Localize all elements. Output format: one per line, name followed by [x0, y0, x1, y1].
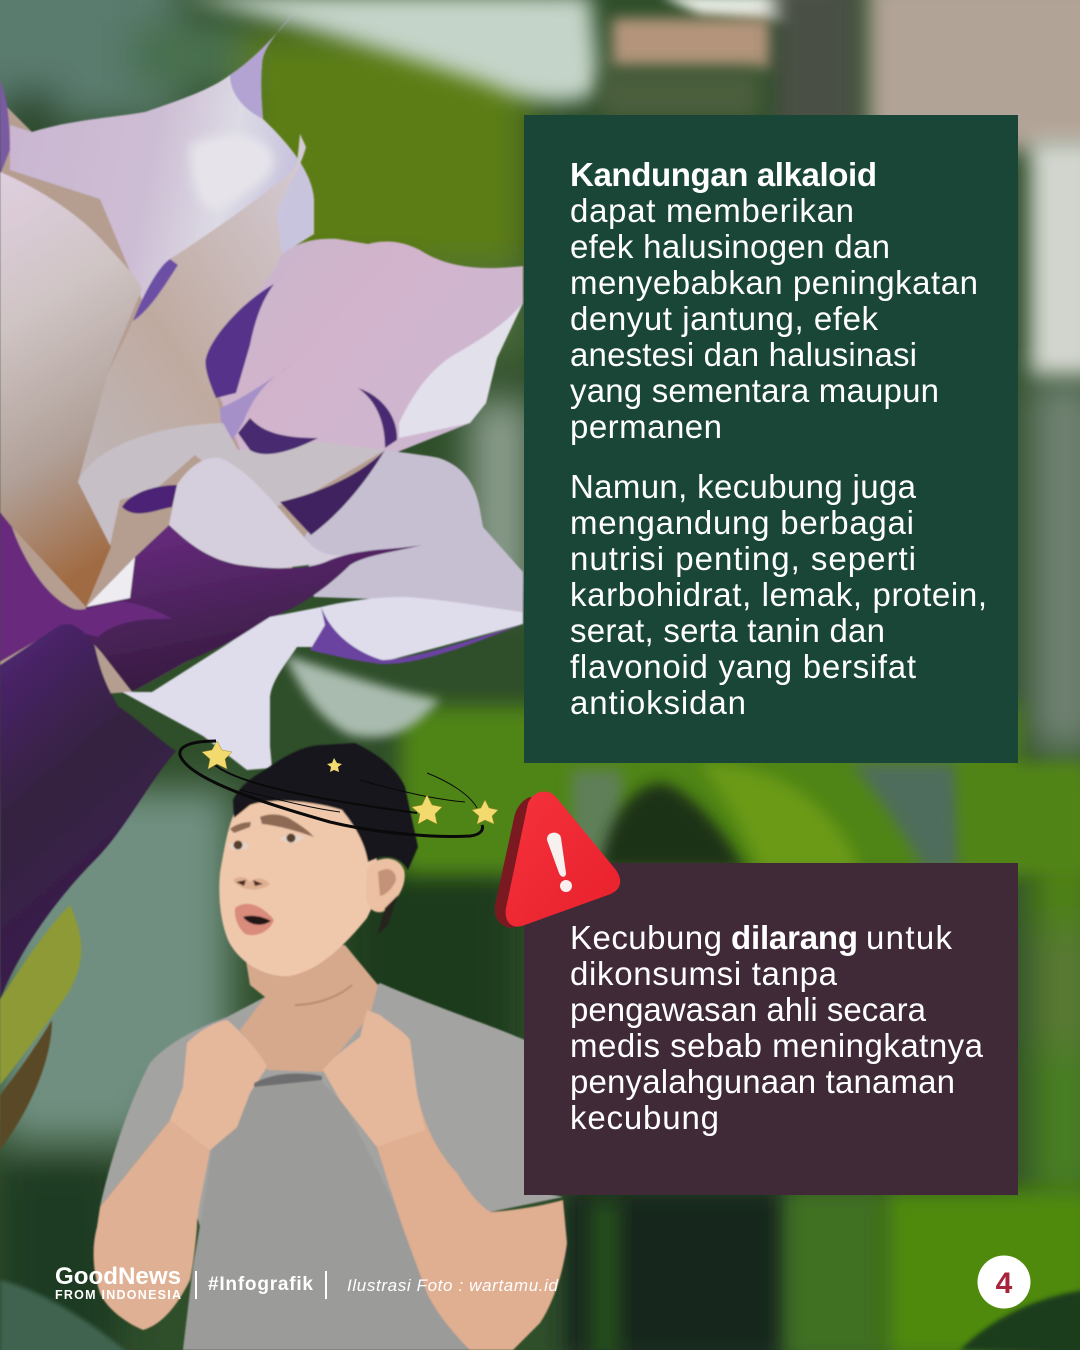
under fold: [78, 423, 385, 545]
text: alkaloid effects: yang sementara maupun: [570, 372, 939, 409]
petal tip lavender: [230, 0, 304, 119]
text: warning message: Kecubung: [570, 919, 722, 956]
text: alkaloid effects: anestesi dan halusinasi: [570, 336, 917, 373]
text: alkaloid effects: dapat memberikan: [570, 192, 854, 229]
middle pale petal: [78, 134, 306, 482]
text: nutrition: karbohidrat, lemak, protein,: [570, 576, 987, 613]
dark purple petal: [80, 525, 422, 692]
page number: 4: [996, 1267, 1013, 1300]
text: nutrition: [570, 468, 987, 721]
green band between panels: [400, 706, 1020, 876]
panel: warning: [524, 863, 1018, 1195]
torso: [183, 1080, 470, 1350]
text: warning message: [570, 919, 984, 1136]
left arm: [94, 1120, 237, 1330]
text: warning message: untuk: [866, 919, 952, 956]
text: alkaloid effects: menyebabkan peningkatan: [570, 264, 978, 301]
footer logo: GoodNews: [55, 1263, 181, 1290]
pale top leaf: [180, 0, 600, 102]
text: alkaloid effects: denyut jantung, efek: [570, 300, 878, 337]
text: warning message: dilarang: [731, 919, 858, 956]
text: warning message: pengawasan ahli secara: [570, 991, 927, 1028]
head: [219, 795, 385, 976]
curl dark: [238, 418, 318, 454]
text: alkaloid effects: [570, 156, 978, 445]
left fist: [170, 1020, 267, 1150]
text: nutrition: serat, serta tanin dan: [570, 612, 885, 649]
spike: [220, 363, 294, 455]
hair: [233, 743, 418, 870]
footer logo: FROM INDONESIA: [55, 1288, 181, 1302]
person with stunned expression: [94, 743, 567, 1350]
photo credit: Ilustrasi Foto : wartamu.id: [347, 1276, 559, 1295]
text: alkaloid effects: Kandungan alkaloid: [570, 156, 877, 193]
text: alkaloid effects: permanen: [570, 408, 722, 445]
text: nutrition: antioksidan: [570, 684, 746, 721]
lower lobe: [169, 458, 350, 575]
dizzy ring and stars: [180, 741, 498, 836]
lower right petal: [304, 450, 523, 612]
ear: [366, 858, 405, 912]
eyes: [228, 834, 304, 850]
mouth: [235, 904, 274, 935]
shirt: [100, 983, 563, 1350]
eyebrows: [230, 814, 314, 837]
flower: [0, 0, 523, 1150]
dark inner tip: [205, 284, 274, 398]
left purple stripe: [0, 80, 10, 175]
page number: [978, 1256, 1030, 1308]
neck and chest: [240, 945, 378, 1072]
text: nutrition: mengandung berbagai: [570, 504, 914, 541]
upper back petal: [10, 0, 314, 300]
flower silhouette base: [0, 100, 400, 700]
text: warning message: medis sebab meningkatnya: [570, 1027, 984, 1064]
bottom greens: [565, 1190, 785, 1350]
footer logo: [55, 1263, 181, 1302]
tan blur top right: [612, 18, 772, 68]
yellow stem leaf: [0, 905, 81, 1085]
footer divider and hashtag: #Infografik: [208, 1274, 313, 1295]
panel: alkaloid info: [524, 115, 1018, 763]
purple lobe tip: [122, 485, 177, 514]
nose: [233, 877, 270, 890]
text: warning message: kecubung: [570, 1099, 719, 1136]
dark stripe: [280, 450, 385, 535]
collar hem: [254, 1074, 322, 1087]
purple left flare: [0, 512, 172, 662]
white bottom petal: [122, 597, 523, 770]
text: nutrition: nutrisi penting, seperti: [570, 540, 916, 577]
exclamation mark: [547, 833, 566, 877]
text: warning message: penyalahgunaan tanaman: [570, 1063, 955, 1100]
petal highlight: [190, 134, 274, 211]
right fist: [323, 1010, 425, 1147]
text: warning message: dikonsumsi tanpa: [570, 955, 838, 992]
text: alkaloid effects: efek halusinogen dan: [570, 228, 890, 265]
text: nutrition: Namun, kecubung juga: [570, 468, 917, 505]
icon: warning triangle: [495, 791, 620, 928]
footer divider and hashtag: [195, 1271, 327, 1299]
right pink petal: [206, 239, 523, 453]
text: nutrition: flavonoid yang bersifat: [570, 648, 916, 685]
big dark trumpet: [0, 624, 176, 1000]
left pale petal: [0, 172, 142, 607]
right arm: [340, 1093, 567, 1350]
